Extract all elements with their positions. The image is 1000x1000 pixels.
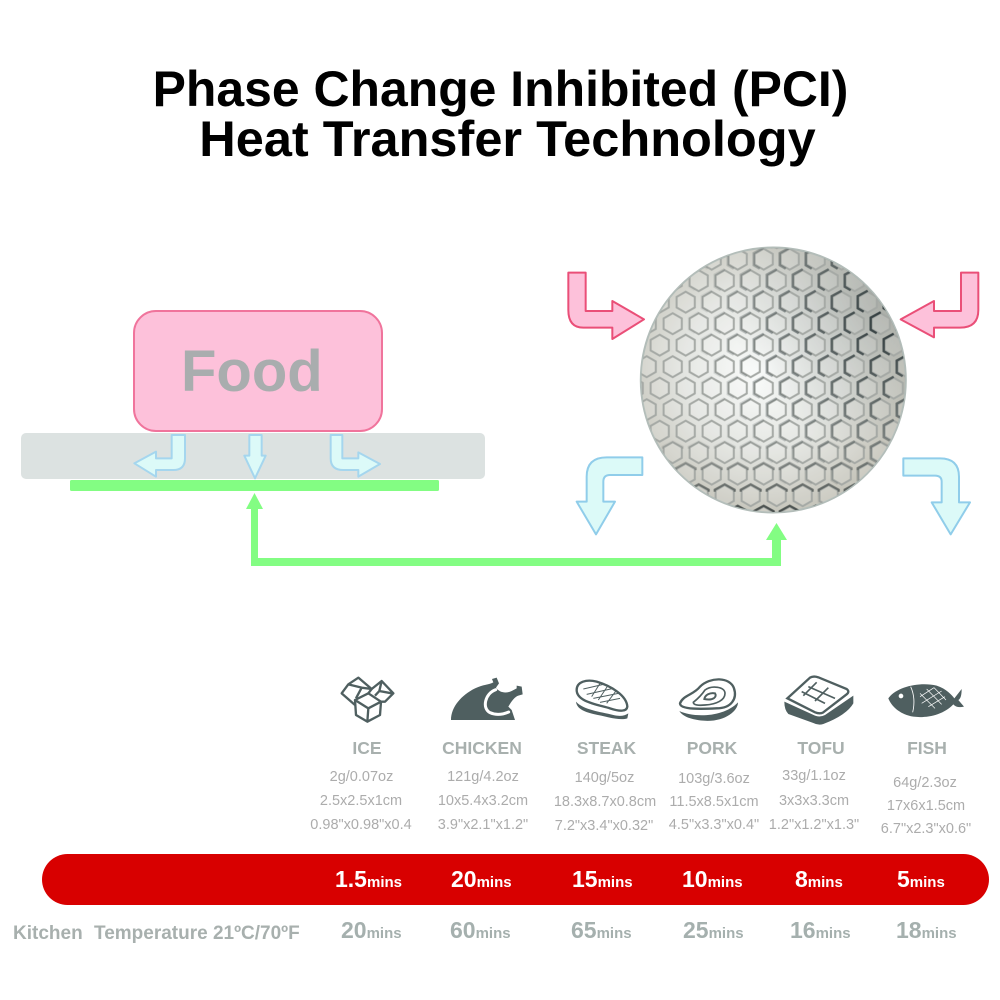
honeycomb pattern [642, 248, 906, 512]
kitchen times [341, 917, 957, 943]
food block [134, 311, 382, 431]
title [153, 61, 848, 167]
text block: tofu: TOFU [797, 738, 845, 758]
text block: ice: 0.98"x0.98"x0.4 [310, 817, 412, 833]
panel: honeycomb disc [640, 246, 907, 514]
food label: Food [181, 339, 323, 404]
arrow: warm left [568, 273, 644, 339]
icon: steak [576, 681, 628, 719]
disc [641, 248, 906, 512]
icon: pork [679, 679, 738, 721]
text block: ice [310, 738, 412, 833]
kitchen times: 60mins [450, 917, 511, 943]
text block: tofu [769, 738, 859, 833]
arrow: warm right [901, 273, 978, 337]
text block: steak: 140g/5oz [575, 770, 634, 786]
arrow: green heat path [246, 493, 787, 566]
text block: tofu: 3x3x3.3cm [779, 793, 849, 809]
text block: ice: ICE [352, 738, 382, 758]
text block: steak: STEAK [577, 738, 637, 758]
kitchen times: 20mins [341, 917, 402, 943]
text block: pork [669, 738, 759, 833]
heat spreader bar [70, 480, 439, 491]
arrow: cold right [903, 458, 970, 534]
PCI times: 8mins [795, 866, 843, 892]
text block: pork: 11.5x8.5x1cm [669, 794, 759, 810]
text block: fish: FISH [907, 738, 947, 758]
text block: chicken: 3.9"x2.1"x1.2" [438, 817, 528, 833]
PCI times: 20mins [451, 866, 512, 892]
title: Heat Transfer Technology [199, 110, 816, 167]
panel: food on plate diagram [21, 311, 485, 491]
text block: fish: 64g/2.3oz [893, 775, 957, 791]
PCI times: 5mins [897, 866, 945, 892]
text block: fish: 6.7"x2.3"x0.6" [881, 821, 971, 837]
text block: tofu: 33g/1.1oz [782, 768, 846, 784]
text block: steak: 18.3x8.7x0.8cm [554, 794, 656, 810]
text block: fish [881, 738, 971, 837]
text block: ice: 2g/0.07oz [330, 769, 393, 785]
text block: chicken [438, 738, 528, 833]
icon: ice cubes [342, 678, 393, 722]
text block: chicken: CHICKEN [442, 738, 522, 758]
text block: steak [554, 738, 656, 834]
bar [42, 854, 989, 905]
panel: red PCI times bar [42, 854, 989, 905]
title: Phase Change Inhibited (PCI) [153, 61, 848, 117]
text block: chicken: 10x5.4x3.2cm [438, 793, 528, 809]
icon: warm and cold arrows around disc [568, 273, 978, 534]
text block: pork: PORK [687, 738, 738, 758]
text block: fish: 17x6x1.5cm [887, 798, 965, 814]
icon: fish [888, 684, 964, 717]
PCI times: 15mins [572, 866, 633, 892]
panel: kitchen temperature row [13, 917, 957, 944]
PCI times [335, 866, 945, 892]
PCI times: 1.5mins [335, 866, 402, 892]
icon: chicken [451, 678, 523, 720]
kitchen times: 65mins [571, 917, 632, 943]
plate [21, 433, 485, 479]
kitchen times: 25mins [683, 917, 744, 943]
text block: steak: 7.2"x3.4"x0.32" [555, 818, 653, 834]
icon: tofu [784, 677, 853, 725]
kitchen times: 18mins [896, 917, 957, 943]
text block: ice: 2.5x2.5x1cm [320, 793, 402, 809]
text block: chicken: 121g/4.2oz [447, 769, 519, 785]
kitchen label: Kitchen [13, 923, 83, 944]
icon: small cold arrows [134, 435, 380, 478]
text block: pork: 103g/3.6oz [678, 771, 750, 787]
PCI times: 10mins [682, 866, 743, 892]
kitchen times: 16mins [790, 917, 851, 943]
text block: pork: 4.5"x3.3"x0.4" [669, 817, 759, 833]
text block: tofu: 1.2"x1.2"x1.3" [769, 817, 859, 833]
arrow: cold left [577, 457, 642, 534]
kitchen label: Temperature 21ºC/70ºF [94, 923, 300, 944]
